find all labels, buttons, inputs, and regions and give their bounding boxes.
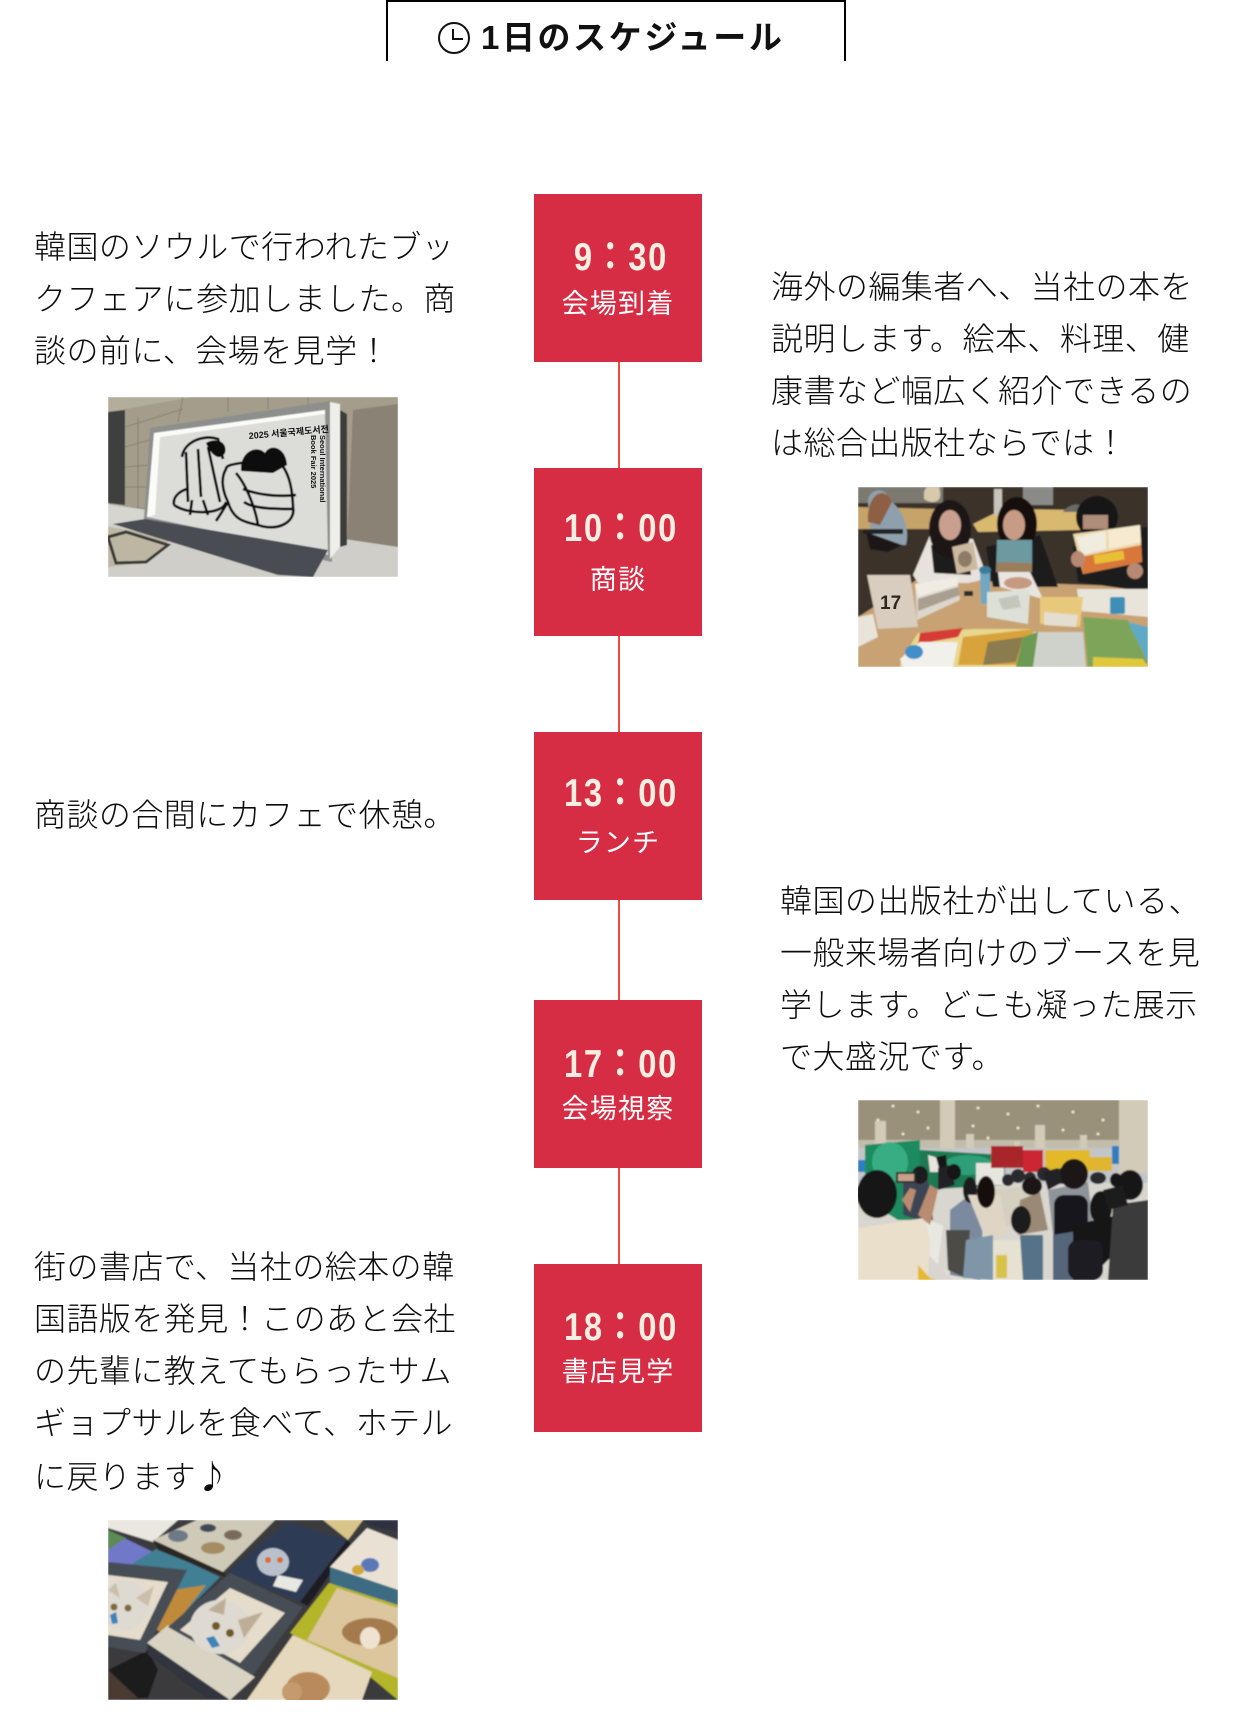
text block: arrival: 談の前に、会場を見学！ — [34, 333, 390, 369]
photo: three editors with books — [858, 487, 1148, 667]
photo: crowded exhibition hall — [858, 1100, 1148, 1280]
time: 17：00 — [564, 1033, 678, 1089]
text block: meeting: 海外の編集者へ、当社の本を — [771, 269, 1193, 305]
text block: venue tour: で大盛況です。 — [780, 1039, 1004, 1075]
text block: bookstore: の先輩に教えてもらったサム — [34, 1353, 452, 1389]
text block: meeting: 康書など幅広く紹介できるの — [771, 373, 1192, 409]
time: 10：00 — [564, 497, 678, 553]
photo: three editors with books: 17 — [880, 593, 901, 614]
text block: bookstore — [34, 1249, 456, 1498]
label: 書店見学 — [562, 1357, 674, 1387]
time: 18：00 — [564, 1296, 678, 1352]
text block: venue tour: 一般来場者向けのブースを見 — [780, 935, 1200, 971]
text block: arrival: クフェアに参加しました。商 — [34, 281, 456, 317]
title tab — [386, 0, 846, 61]
time box 17:00 — [534, 1000, 702, 1168]
text block: bookstore: ギョプサルを食べて、ホテル — [34, 1405, 453, 1441]
label: 会場到着 — [562, 289, 674, 319]
time box 18:00 — [534, 1264, 702, 1432]
text block: venue tour: 韓国の出版社が出している、 — [780, 883, 1201, 919]
time box 9:30 — [534, 194, 702, 362]
text block: venue tour — [780, 883, 1201, 1075]
text block: arrival: 韓国のソウルで行われたブッ — [34, 229, 454, 265]
time box 13:00 — [534, 732, 702, 900]
time: 13：00 — [564, 762, 678, 818]
photo: book fair entrance: Book Fair 2025 — [309, 435, 318, 488]
text block: meeting — [771, 269, 1193, 461]
photo: picture books at a bookstore — [108, 1520, 398, 1700]
text block: meeting: 説明します。絵本、料理、健 — [771, 321, 1190, 357]
photo: book fair entrance: Seoul International — [318, 435, 327, 503]
label: 商談 — [590, 565, 646, 595]
text block: arrival — [34, 229, 456, 369]
text block: lunch: 商談の合間にカフェで休憩。 — [34, 797, 456, 833]
text block: bookstore: 街の書店で、当社の絵本の韓 — [34, 1249, 455, 1285]
heading: 1日のスケジュール — [481, 19, 784, 56]
time box 10:00 — [534, 468, 702, 636]
time: 9：30 — [574, 226, 668, 282]
text block: meeting: は総合出版社ならでは！ — [771, 425, 1127, 461]
label: ランチ — [576, 828, 660, 858]
text block: bookstore: に戻ります♪ — [34, 1452, 229, 1498]
text block: venue tour: 学します。どこも凝った展示 — [780, 987, 1198, 1023]
photo: book fair entrance: 2025 서울국제도서전 — [248, 423, 329, 441]
text block: bookstore: 国語版を発見！このあと会社 — [34, 1301, 456, 1337]
photo: book fair entrance — [108, 397, 398, 577]
label: 会場視察 — [562, 1094, 674, 1124]
icon: clock — [438, 22, 470, 54]
